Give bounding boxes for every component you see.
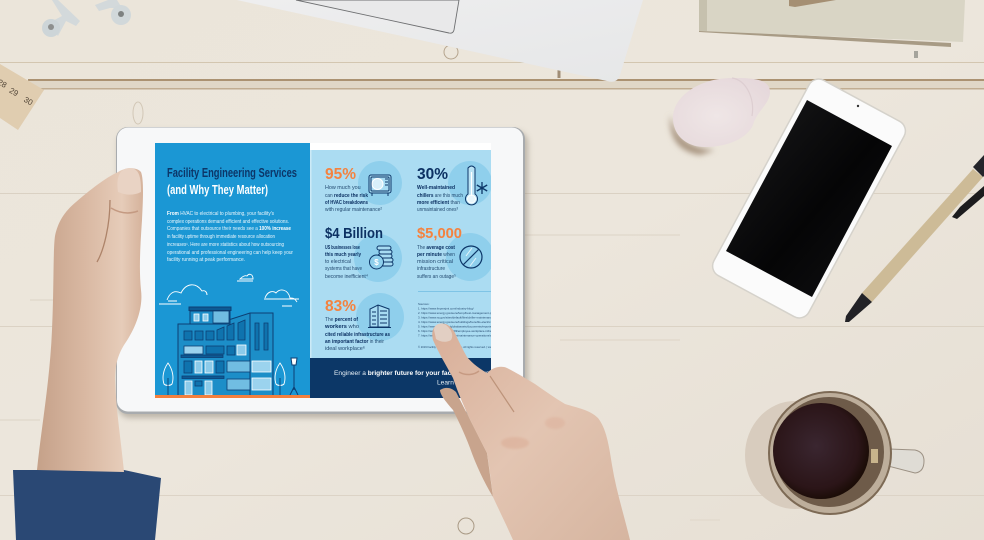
stat: 30%: Well-maintained (417, 185, 455, 191)
intro paragraph: From HVAC to electrical to plumbing, your facility's (167, 211, 274, 217)
fingernail (434, 324, 452, 342)
sources: 1. https://www.fmpmsjmi.com/industry-blog/ (418, 306, 474, 310)
stat: 83% (324, 293, 404, 352)
stat: $5,000: per minute when (417, 252, 455, 258)
cup of tea (745, 392, 924, 514)
tablet (116, 127, 528, 418)
wooden ruler: 29 (8, 86, 20, 98)
wooden ruler: 30 (22, 95, 35, 108)
stat: 30%: more efficient than (417, 200, 460, 206)
stat: $4 Billion: become inefficient⁴ (325, 274, 369, 280)
infographic screen (155, 143, 523, 398)
stat: $5,000: suffers an outage⁵ (417, 274, 456, 280)
stat: 83%: an important factor in their (325, 339, 384, 345)
stat: 30%: unmaintained ones³ (417, 207, 458, 213)
stat: $4 Billion: systems that have (325, 266, 362, 272)
call to action band: Learn more (437, 380, 471, 386)
stat: $4 Billion: $4 Billion (325, 226, 383, 242)
intro paragraph: complex operations demand efficient and effective solutions. (167, 219, 289, 225)
stat: 95%: can reduce the risk (325, 193, 368, 199)
stat: 95%: How much you (325, 185, 361, 191)
intro paragraph: operational and professional engineering can help keep your (167, 250, 293, 256)
sources (418, 291, 491, 348)
stat: $4 Billion: this much yearly (325, 252, 361, 258)
sources: Sources: (418, 302, 430, 306)
sources: 6. https://www.hbr.org/2015/03/employee-workplace-infrastructure-survey (418, 329, 512, 333)
icon: coins: $ (374, 258, 379, 267)
icon: HVAC unit (369, 175, 391, 196)
icon: outage symbol (460, 246, 482, 268)
call to action band (310, 358, 507, 398)
panel: introduction (155, 143, 310, 398)
stat: $4 Billion: to electrical (325, 259, 351, 265)
left hand (37, 168, 143, 472)
intro paragraph: in facility uptime through immediate resource allocation (167, 234, 275, 240)
sleeve (13, 470, 161, 540)
right hand (432, 324, 630, 540)
stat: 30%: 30% (417, 166, 448, 183)
stat: 30%: chillers are this much (417, 193, 463, 199)
stat: 83%: The percent of (325, 317, 358, 323)
orange base strip (155, 395, 310, 398)
sources: 3. https://www.ny.gov/sites/default/files/chiller-maintenance-publication (418, 316, 508, 320)
cup handle (888, 449, 924, 473)
stat: 83%: workers who (324, 324, 359, 330)
stat: $4 Billion: US businesses lose (325, 245, 360, 251)
trees (163, 363, 285, 395)
stat: 95%: of HVAC breakdowns (325, 200, 368, 206)
wooden ruler (0, 64, 44, 130)
stat: 95%: with regular maintenance² (324, 207, 382, 213)
thumbnail (117, 168, 141, 195)
stat: 83%: 83% (325, 298, 356, 315)
sources: © 2019 Facility Engineering Services. All rights reserved. | www.example.com (418, 345, 511, 349)
smartphone (709, 75, 909, 322)
stat: 83%: ideal workplace⁶ (325, 346, 365, 352)
intro paragraph: facility running at peak performance. (167, 257, 245, 263)
panel: statistics (310, 150, 491, 358)
stat: $5,000: $5,000 (417, 226, 462, 242)
stat: 95%: 95% (325, 166, 356, 183)
intro paragraph (167, 211, 293, 263)
tea surface (773, 403, 869, 499)
binder clips (42, 0, 131, 37)
phone screen (726, 100, 892, 297)
notebook (699, 0, 965, 47)
sources: 5. https://www.vertiv.com/globalassets/documents/reports-data-center-outage-cost (418, 324, 523, 328)
intro paragraph: Companies that outsource their needs see a 100% increase (167, 226, 291, 232)
intro paragraph: increases¹. Here are more statistics about how outsourcing (167, 242, 284, 248)
sources: 4. https://www.energy.gov/eere/buildings/benefits-electrical-systems-maintenance (418, 320, 522, 324)
heading: Facility Engineering Services (167, 165, 297, 180)
stat: $5,000: infrastructure (417, 266, 445, 272)
stat: 30% (417, 161, 492, 213)
stat: 83%: cited reliable infrastructure as (325, 332, 390, 338)
stat: $4 Billion (325, 226, 402, 282)
sources: 2. https://www.energy.gov/eere/femp/best-management-practice-hvac (418, 311, 508, 315)
clouds (159, 274, 299, 306)
stat: $5,000: The average cost (417, 245, 455, 251)
call to action band: Engineer a brighter future for your facility. Discover how. (334, 370, 507, 377)
pen (845, 155, 984, 322)
icon: thermometer and snowflake (466, 166, 487, 205)
building illustration (178, 307, 273, 395)
laptop corner (237, 0, 643, 82)
stat: $5,000: mission critical (417, 259, 453, 265)
icon: office tower (368, 305, 391, 328)
stat: $5,000 (417, 226, 494, 281)
street lamp (290, 358, 298, 395)
heading: (and Why They Matter) (167, 182, 268, 197)
pink stone (670, 78, 770, 155)
stat: 95% (324, 161, 402, 213)
sources: 7. https://www.facilitiesnet.com/maintenance-operations/article-blog-report (418, 334, 513, 338)
